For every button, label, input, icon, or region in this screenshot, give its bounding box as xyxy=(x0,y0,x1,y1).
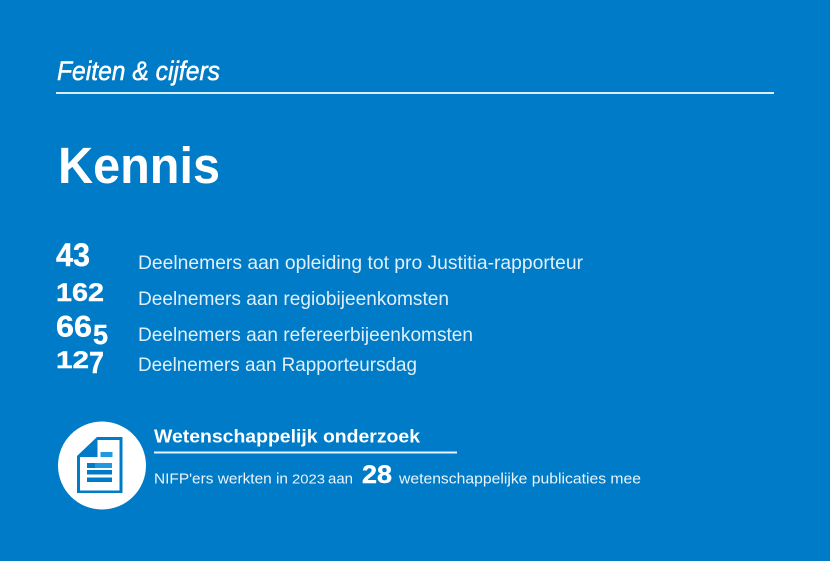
subheading: Wetenschappelijk onderzoek: Wetenschappelijk onderzoek xyxy=(154,426,421,446)
stat: 665: Deelnemers aan refereerbijeenkomsten xyxy=(138,324,473,346)
stat: 127: 12 xyxy=(56,347,89,374)
stat: 43: Deelnemers aan opleiding tot pro Justitia-rapporteur xyxy=(138,252,583,274)
icon: document in white circle xyxy=(58,422,146,510)
stat: 665: 5 xyxy=(93,319,108,350)
heading: Feiten & cijfers: Feiten & cijfers xyxy=(57,56,220,86)
text: publications: NIFP'ers werkten in xyxy=(154,472,288,488)
text: publications: 2023 xyxy=(292,472,325,486)
title: Kennis: Kennis xyxy=(58,137,220,194)
stat: 43 xyxy=(56,237,583,274)
stat: 43: 43 xyxy=(56,237,90,273)
text: publications: wetenschappelijke publicaties mee xyxy=(398,472,641,488)
statistics list xyxy=(56,237,583,380)
stat: 162: Deelnemers aan regiobijeenkomsten xyxy=(138,288,449,310)
stat: 162: 162 xyxy=(56,279,104,307)
stat: 127 xyxy=(56,345,417,380)
stat: 127: Deelnemers aan Rapporteursdag xyxy=(138,354,417,376)
stat: 665 xyxy=(56,310,473,350)
text: publications xyxy=(154,461,641,489)
stat: 162 xyxy=(56,279,449,310)
stat: 127: 7 xyxy=(89,345,104,380)
text: publications: aan xyxy=(328,472,353,488)
text: publications: 28 xyxy=(362,461,392,489)
stat: 665: 66 xyxy=(56,310,92,344)
